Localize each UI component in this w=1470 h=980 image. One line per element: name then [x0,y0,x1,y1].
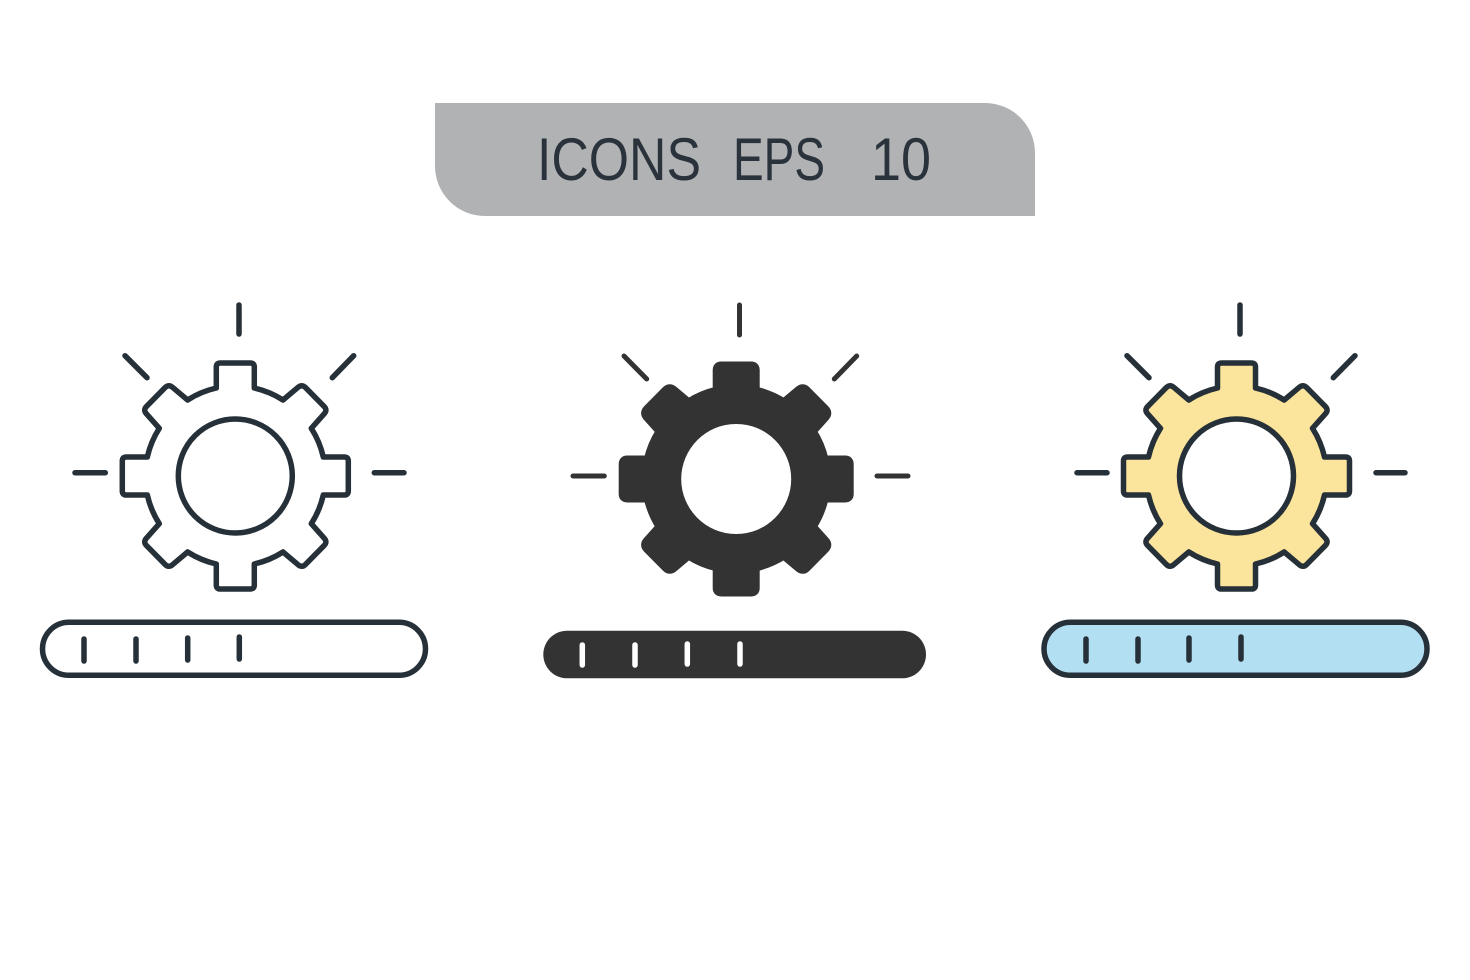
icon: colour gear with progress bar [1044,305,1427,675]
solid gear [623,366,849,592]
banner: ICONS EPS 10: 10 [871,126,931,193]
banner: ICONS EPS 10: EPS [733,126,825,193]
banner: ICONS EPS 10: ICONS [537,126,701,193]
icon: solid gear with progress bar [543,305,926,678]
icon: outline gear with progress bar [42,305,426,675]
outline progress bar [42,622,426,675]
solid rays [573,305,908,476]
colour rays [1077,305,1405,473]
colour progress bar [1044,622,1427,675]
outline gear [122,363,348,589]
colour gear [1124,363,1350,589]
outline rays [75,305,404,473]
solid progress bar [543,631,926,678]
banner: ICONS EPS 10 [435,103,1035,216]
